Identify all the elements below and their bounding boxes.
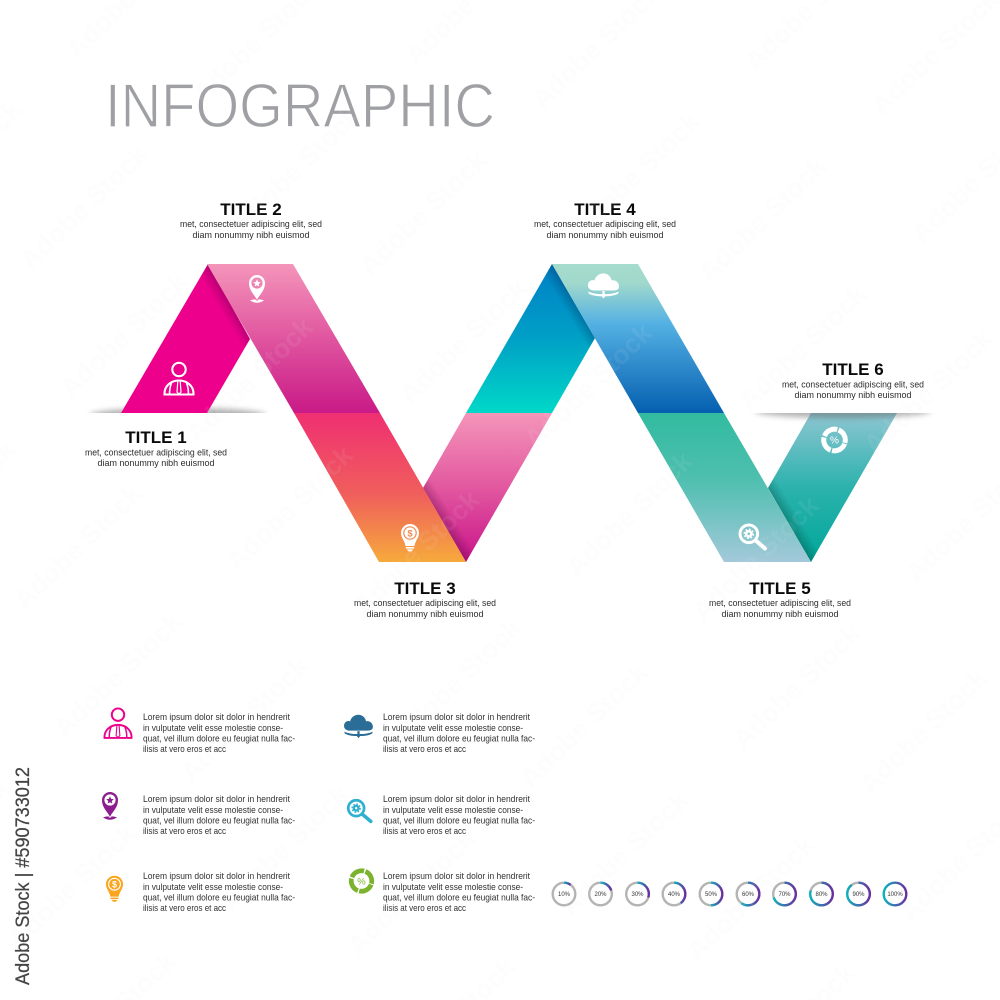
legend icon: location pin [102, 792, 118, 820]
label: title 3: diam nonummy nibh euismod [366, 608, 484, 619]
icon: magnifier on ribbon [740, 525, 765, 548]
label: title 4: met, consectetuer adipiscing elit, sed [534, 218, 676, 229]
legend text 5: Lorem ipsum dolor sit dolor in hendrerit [383, 793, 530, 804]
legend text 2: ilisis at vero eros et acc [143, 825, 226, 836]
ribbon segment 5 [466, 264, 595, 413]
legend text 1: quat, vel illum dolore eu feugiat nulla fac- [143, 732, 295, 744]
label: title 1 [85, 428, 227, 468]
legend text 4: ilisis at vero eros et acc [383, 743, 466, 754]
label: title 2: met, consectetuer adipiscing elit, sed [180, 218, 322, 229]
ribbon segment 6 [552, 264, 724, 413]
label: title 1: met, consectetuer adipiscing elit, sed [85, 446, 227, 458]
label: title 6 [782, 360, 924, 400]
label: title 3 [354, 579, 496, 619]
ring 60%: 60% [742, 892, 755, 898]
stock id side text: Adobe Stock | #590733012 [13, 767, 34, 985]
legend text 1: ilisis at vero eros et acc [143, 743, 226, 754]
legend text 5 [383, 793, 535, 836]
label: title 5: TITLE 5 [749, 579, 811, 598]
legend text 6: Lorem ipsum dolor sit dolor in hendrerit [383, 870, 530, 881]
ring 50% [700, 883, 722, 905]
label: title 1: TITLE 1 [125, 428, 187, 447]
legend text 4: Lorem ipsum dolor sit dolor in hendrerit [383, 711, 530, 722]
legend text 4 [383, 711, 535, 754]
ring 30% [626, 883, 649, 905]
ribbon segment 1 [121, 264, 250, 413]
legend text 2: quat, vel illum dolore eu feugiat nulla fac- [143, 814, 295, 826]
ribbon segment 4 [423, 413, 552, 562]
legend text 2 [143, 793, 295, 836]
icon: cloud on ribbon [588, 273, 619, 298]
ground shadow: title 1 base [89, 405, 267, 413]
legend text 5: quat, vel illum dolore eu feugiat nulla fac- [383, 814, 535, 826]
icon: location pin on ribbon [249, 275, 265, 303]
legend text 6 [383, 870, 535, 913]
label: title 5: met, consectetuer adipiscing elit, sed [709, 597, 851, 608]
legend text 6: in vulputate velit esse molestie conse- [383, 881, 523, 892]
ribbon segment 2 [207, 264, 380, 413]
ribbon segment 8 [768, 413, 897, 562]
ring 30%: 30% [631, 892, 644, 898]
ring 40% [663, 883, 685, 905]
ring 90%: 90% [852, 892, 865, 898]
label: title 4 [534, 200, 676, 240]
legend text 6: ilisis at vero eros et acc [383, 902, 466, 913]
legend text 2: Lorem ipsum dolor sit dolor in hendrerit [143, 793, 290, 804]
ring 90% [847, 883, 870, 905]
legend text 1: Lorem ipsum dolor sit dolor in hendrerit [143, 711, 290, 722]
icon: person on ribbon [164, 363, 194, 394]
legend text 3 [143, 870, 295, 913]
ribbon segment 7 [638, 413, 811, 562]
ring 100%: 100% [887, 892, 903, 898]
progress rings row [553, 883, 906, 905]
legend text 2: in vulputate velit esse molestie conse- [143, 804, 283, 815]
label: title 1: diam nonummy nibh euismod [98, 457, 214, 468]
legend icon: person [104, 708, 132, 738]
ring 50%: 50% [705, 892, 718, 898]
ring 100% [884, 883, 906, 905]
title: INFOGRAPHIC [105, 72, 495, 141]
ring 80% [810, 883, 833, 905]
zigzag ribbon [121, 264, 897, 562]
ring 20%: 20% [594, 892, 607, 898]
legend text 3: in vulputate velit esse molestie conse- [143, 881, 283, 892]
legend text 1: in vulputate velit esse molestie conse- [143, 722, 283, 733]
legend text 5: in vulputate velit esse molestie conse- [383, 804, 523, 815]
legend icon: magnifier [348, 800, 371, 821]
label: title 2: TITLE 2 [220, 200, 282, 219]
icon: percent donut on ribbon [821, 426, 848, 454]
label: title 2: diam nonummy nibh euismod [192, 229, 310, 240]
legend text 3: ilisis at vero eros et acc [143, 902, 226, 913]
label: title 3: met, consectetuer adipiscing elit, sed [354, 597, 496, 608]
legend icon: percent donut [348, 868, 375, 894]
ring 70% [773, 883, 796, 905]
ground shadow: title 6 base [754, 413, 932, 421]
legend text 6: quat, vel illum dolore eu feugiat nulla fac- [383, 892, 535, 902]
label: title 6: met, consectetuer adipiscing elit, sed [782, 378, 924, 390]
label: title 6: TITLE 6 [822, 360, 884, 379]
ribbon segment 3 [294, 413, 466, 562]
ring 20% [589, 883, 612, 905]
legend text 3: Lorem ipsum dolor sit dolor in hendrerit [143, 870, 290, 881]
ring 80%: 80% [815, 892, 828, 898]
legend text 4: quat, vel illum dolore eu feugiat nulla fac- [383, 732, 535, 744]
legend icon: light bulb [106, 876, 123, 902]
ring 40%: 40% [668, 892, 681, 898]
label: title 5: diam nonummy nibh euismod [722, 608, 838, 619]
label: title 4: diam nonummy nibh euismod [546, 229, 664, 240]
ring 70%: 70% [778, 892, 791, 898]
label: title 4: TITLE 4 [574, 200, 636, 219]
legend icon: cloud [344, 715, 373, 738]
ring 10% [553, 883, 575, 905]
label: title 6: diam nonummy nibh euismod [794, 389, 912, 400]
icon: light bulb on ribbon [401, 524, 419, 551]
label: title 2 [180, 200, 322, 240]
ring 60% [737, 883, 759, 905]
legend text 5: ilisis at vero eros et acc [383, 825, 466, 836]
label: title 3: TITLE 3 [394, 579, 456, 598]
legend text 1 [143, 711, 295, 754]
ring 10%: 10% [558, 892, 571, 898]
legend text 3: quat, vel illum dolore eu feugiat nulla fac- [143, 892, 295, 902]
legend text 4: in vulputate velit esse molestie conse- [383, 722, 523, 733]
label: title 5 [709, 579, 851, 619]
